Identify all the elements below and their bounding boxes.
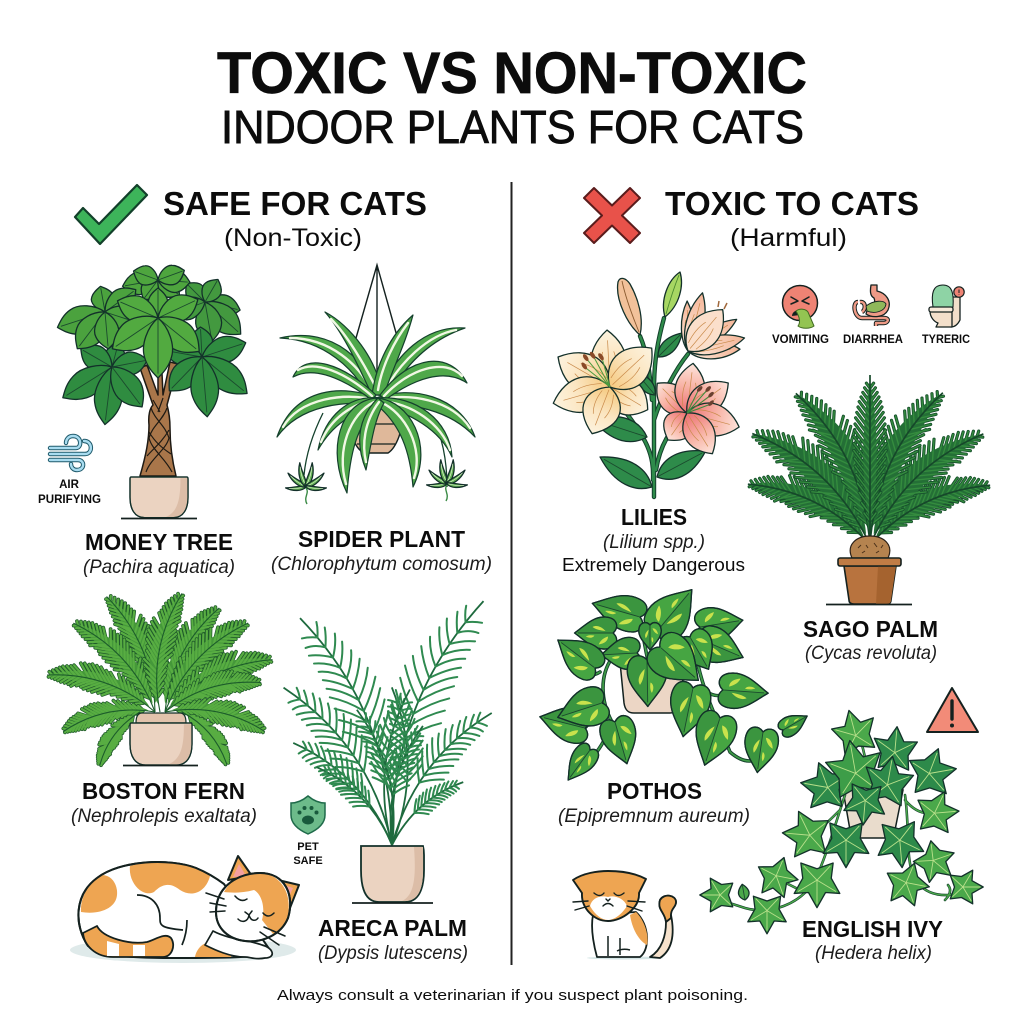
icon: diarrhea bbox=[843, 285, 903, 346]
icon: red cross bbox=[584, 188, 640, 243]
money tree plant bbox=[53, 261, 256, 518]
title: TOXIC VS NON-TOXIC bbox=[217, 41, 807, 106]
english ivy label bbox=[802, 916, 943, 964]
spider plant label: SPIDER PLANT bbox=[298, 526, 465, 552]
spider plant label: (Chlorophytum comosum) bbox=[271, 554, 492, 575]
pothos bbox=[536, 576, 812, 787]
lilies label: LILIES bbox=[621, 504, 687, 530]
icon: toilet bbox=[922, 285, 970, 346]
icon: pet safe badge bbox=[291, 796, 325, 867]
icon: vomiting: VOMITING bbox=[772, 334, 829, 346]
boston fern label: (Nephrolepis exaltata) bbox=[71, 806, 257, 827]
spider plant label bbox=[271, 526, 492, 575]
icon: diarrhea: DIARRHEA bbox=[843, 334, 903, 346]
safe heading bbox=[163, 185, 427, 252]
sago palm bbox=[747, 375, 991, 604]
money tree label bbox=[83, 529, 235, 578]
footer note: Always consult a veterinarian if you suspect plant poisoning. bbox=[277, 987, 748, 1004]
english ivy bbox=[700, 705, 983, 934]
symptoms icons bbox=[772, 285, 970, 346]
spider plant bbox=[277, 265, 475, 504]
safe heading: SAFE FOR CATS bbox=[163, 185, 427, 222]
boston fern bbox=[46, 592, 273, 766]
icon: pet safe badge: PET bbox=[297, 841, 319, 853]
areca palm label: (Dypsis lutescens) bbox=[318, 943, 468, 964]
money tree label: (Pachira aquatica) bbox=[83, 557, 235, 578]
title bbox=[217, 41, 807, 153]
panel: toxic to cats bbox=[277, 185, 991, 1004]
toxic heading: (Harmful) bbox=[730, 224, 847, 252]
icon: air purifying bbox=[38, 436, 101, 506]
sago palm label bbox=[803, 616, 938, 664]
column divider bbox=[510, 182, 512, 965]
icon: air purifying: PURIFYING bbox=[38, 494, 101, 506]
lilies label: Extremely Dangerous bbox=[562, 555, 745, 575]
lilies label bbox=[562, 504, 745, 575]
sago palm label: SAGO PALM bbox=[803, 616, 938, 642]
icon: pet safe badge: SAFE bbox=[293, 855, 323, 867]
english ivy label: (Hedera helix) bbox=[815, 943, 932, 964]
icon: air purifying: AIR bbox=[59, 479, 80, 491]
toxic heading bbox=[665, 185, 919, 252]
areca palm bbox=[283, 601, 508, 903]
toxic heading: TOXIC TO CATS bbox=[665, 185, 919, 222]
lilies label: (Lilium spp.) bbox=[603, 532, 705, 553]
pothos label: (Epipremnum aureum) bbox=[558, 806, 750, 827]
money tree label: MONEY TREE bbox=[85, 529, 233, 555]
sad cat bbox=[573, 871, 676, 960]
safe heading: (Non-Toxic) bbox=[224, 224, 362, 252]
boston fern label bbox=[71, 778, 257, 827]
pothos label bbox=[558, 778, 750, 827]
lilies bbox=[549, 272, 746, 497]
areca palm label: ARECA PALM bbox=[318, 915, 467, 941]
pothos label: POTHOS bbox=[607, 778, 702, 804]
sleeping cat bbox=[70, 856, 299, 963]
icon: green check mark bbox=[75, 185, 147, 244]
icon: warning triangle bbox=[927, 688, 978, 732]
areca palm label bbox=[318, 915, 468, 964]
icon: vomiting bbox=[772, 286, 829, 346]
icon: toilet: TYRERIC bbox=[922, 334, 970, 346]
english ivy label: ENGLISH IVY bbox=[802, 916, 943, 942]
boston fern label: BOSTON FERN bbox=[82, 778, 245, 804]
sago palm label: (Cycas revoluta) bbox=[805, 643, 937, 664]
panel: safe for cats bbox=[38, 185, 508, 964]
title: INDOOR PLANTS FOR CATS bbox=[221, 101, 804, 153]
